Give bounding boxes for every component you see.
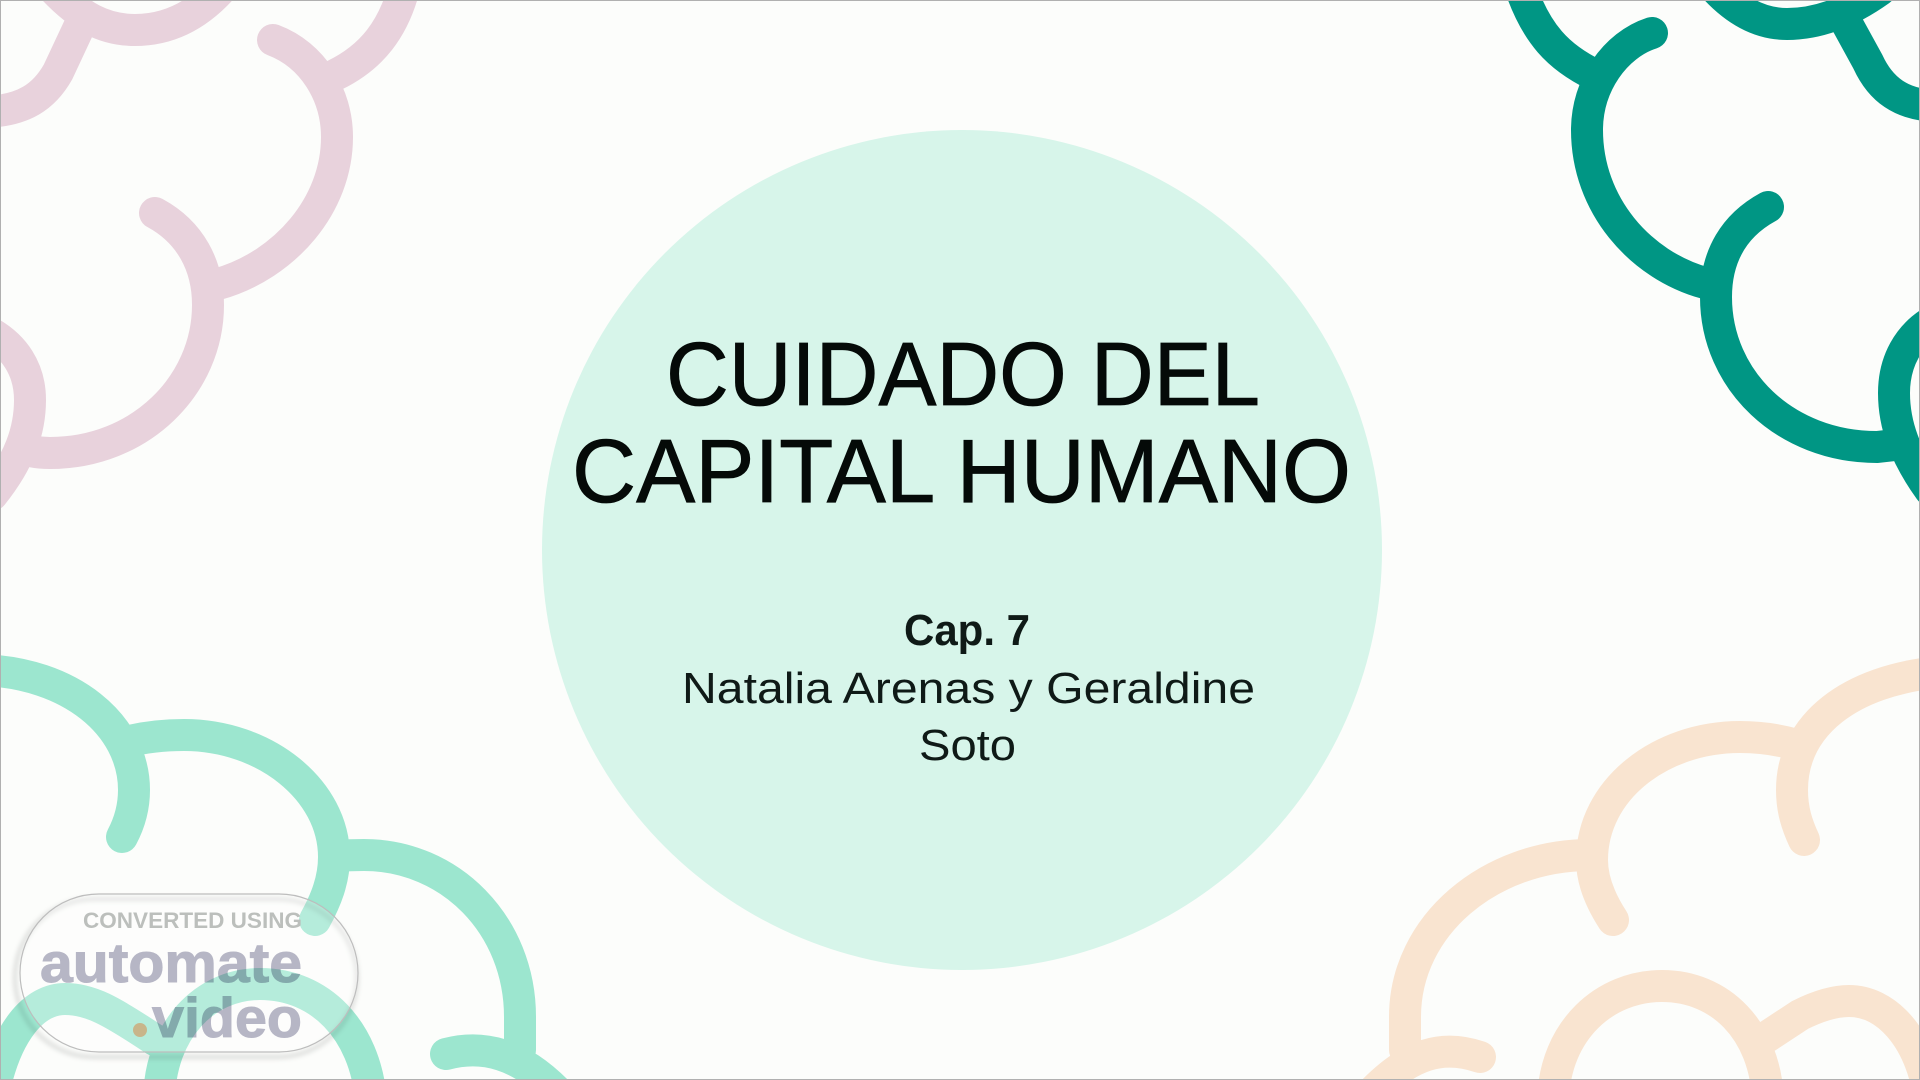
arc: pink branch to top edge — [335, 0, 406, 75]
badge dot — [133, 1023, 147, 1037]
arc: pink edge curl on left — [0, 330, 30, 495]
central mint circle — [542, 130, 1382, 970]
arc: first peach curl — [1792, 672, 1920, 840]
badge word: automate: automate — [40, 931, 302, 994]
arc: mint bottom lobe — [159, 984, 371, 1080]
arc: teal corner branch — [1845, 20, 1920, 106]
arc: mint hook at bottom — [446, 1050, 565, 1080]
arc: peach hook at bottom — [1365, 1052, 1480, 1080]
subtitle block — [682, 606, 1255, 770]
badge caption: CONVERTED USING — [83, 908, 302, 933]
arc: peach bottom lobe — [1553, 986, 1768, 1080]
badge shadow — [15, 899, 357, 1057]
chapter label: Cap. 7 — [904, 606, 1030, 655]
arc: second mint curl — [125, 735, 334, 920]
decoration: mint arcs, bottom-left corner — [0, 670, 565, 1080]
title — [572, 325, 1351, 522]
arc: teal branch to top edge — [1518, 0, 1595, 75]
arc: third peach curl — [1405, 855, 1590, 1050]
arc: upper pink curl — [218, 40, 337, 284]
arc: pink top curve — [50, 0, 222, 30]
arc: mint bottom-left lobe — [0, 999, 155, 1080]
title line 1: CUIDADO DEL — [666, 325, 1260, 425]
decoration: pink arcs, top-left corner — [0, 0, 406, 495]
badge word: video: video — [152, 986, 302, 1049]
title line 2: CAPITAL HUMANO — [572, 422, 1351, 522]
arc: lower teal curl — [1716, 207, 1895, 447]
arc: peach bottom-right lobe — [1762, 1001, 1920, 1080]
arc: first mint curl — [0, 670, 134, 837]
authors line 1: Natalia Arenas y Geraldine — [682, 664, 1255, 713]
arc: second peach curl — [1592, 737, 1797, 920]
watermark badge — [15, 894, 358, 1057]
arc: teal edge curl on right — [1894, 320, 1920, 490]
authors line 2: Soto — [919, 721, 1016, 770]
decoration: teal arcs, top-right corner — [1518, 0, 1920, 490]
badge pill — [20, 894, 358, 1052]
arc: lower pink curl — [30, 213, 208, 453]
arc: third mint curl — [337, 855, 520, 1050]
decoration: peach arcs, bottom-right corner — [1365, 672, 1920, 1080]
arc: upper teal curl — [1587, 33, 1705, 283]
arc: pink corner branch — [0, 25, 80, 112]
arc: teal top curve — [1715, 0, 1880, 24]
